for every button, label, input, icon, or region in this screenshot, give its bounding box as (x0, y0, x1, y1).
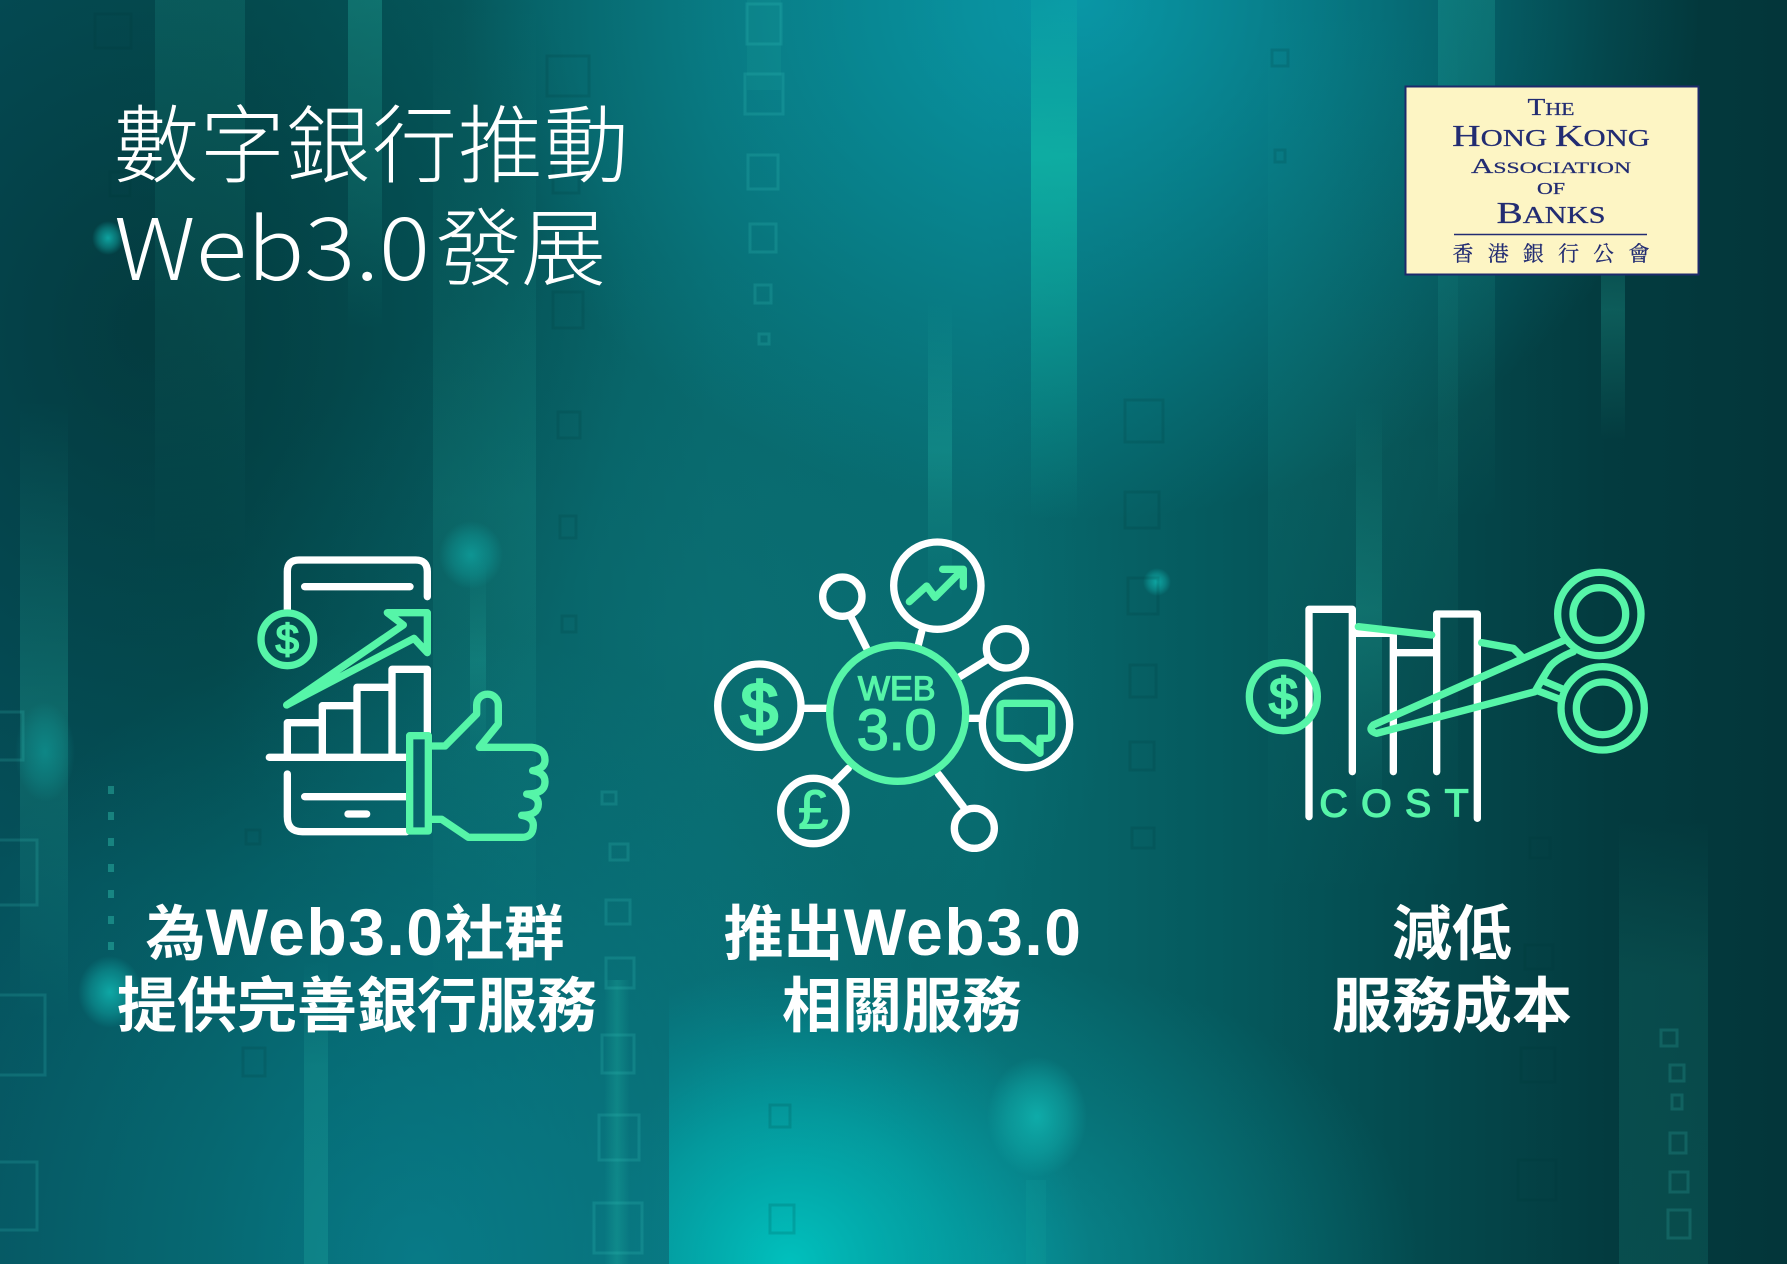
icon: scissors cutting cost (1249, 572, 1644, 826)
logo: The Hong Kong Association of Banks (1406, 86, 1698, 274)
icon: scissors cutting cost: COST (1319, 782, 1469, 826)
caption: banking services for Web3.0 community: 提供完善銀行服務 (117, 973, 597, 1040)
logo: The Hong Kong Association of Banks: H ONG K ONG (1452, 118, 1650, 153)
logo: The Hong Kong Association of Banks: 香港銀行公會 (1452, 242, 1650, 266)
caption: reduce service costs: 減低 (1392, 901, 1512, 968)
icon: phone chart with thumbs up (261, 560, 545, 837)
caption: banking services for Web3.0 community: 為Web3.0社群 (146, 895, 564, 969)
caption: reduce service costs (1332, 901, 1572, 1040)
title: Web3.0 (114, 182, 430, 305)
title (114, 78, 629, 305)
caption: launch Web3.0 services: 推出Web3.0 (724, 895, 1082, 969)
logo: The Hong Kong Association of Banks: THE (1528, 95, 1574, 121)
caption: reduce service costs: 服務成本 (1332, 973, 1572, 1040)
caption: launch Web3.0 services (724, 895, 1082, 1040)
logo: The Hong Kong Association of Banks: OF (1537, 179, 1565, 198)
icon: Web 3.0 network: $ (741, 670, 778, 744)
icon: Web 3.0 network: WEB (858, 670, 935, 708)
icon: Web 3.0 network: £ (798, 778, 829, 840)
icon: scissors cutting cost: $ (1269, 667, 1298, 725)
logo: The Hong Kong Association of Banks: A SSOCIATION (1471, 154, 1632, 178)
logo: The Hong Kong Association of Banks: BANKS (1496, 195, 1606, 230)
caption: launch Web3.0 services: 相關服務 (782, 973, 1022, 1040)
title: 數字銀行推動 (114, 78, 629, 201)
icon: Web 3.0 network: 3.0 (857, 698, 937, 762)
title: 發展 (436, 181, 606, 304)
caption: banking services for Web3.0 community (117, 895, 597, 1040)
icon: phone chart with thumbs up: $ (276, 616, 299, 663)
icon: Web 3.0 network (718, 542, 1070, 848)
